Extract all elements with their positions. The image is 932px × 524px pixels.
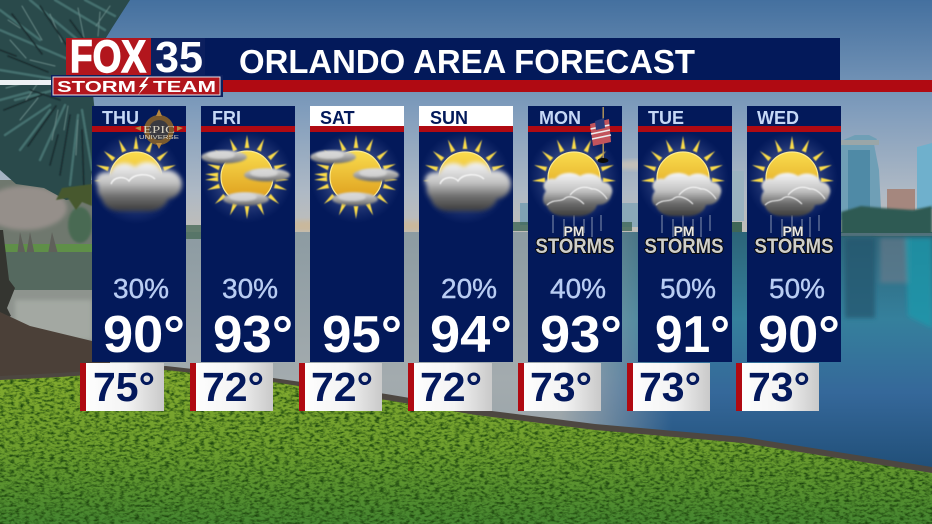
panel: Saturday: 95°: [322, 306, 402, 364]
panel: Sunday: [419, 106, 513, 364]
low temperature: Wednesday: 73°: [748, 364, 810, 410]
panel: Monday: STORMS: [536, 235, 614, 258]
panel: Monday: 40%: [550, 273, 606, 304]
skyline: [185, 135, 932, 239]
FOX 35 Storm Team logo: FOX: [70, 31, 146, 82]
left bank and far trees: [0, 180, 110, 381]
panel: Monday: 93°: [540, 306, 622, 364]
icon: PM storms: [746, 132, 838, 237]
palm fronds: [0, 0, 130, 210]
icon: partly cloudy: [90, 132, 182, 224]
panel: Friday: 93°: [213, 306, 293, 364]
panel: Sunday: 94°: [430, 306, 512, 364]
badge: Epic Universe: UNIVERSE: [139, 135, 179, 141]
icon: PM storms: [637, 132, 729, 237]
FOX 35 Storm Team logo: TEAM: [153, 79, 216, 96]
panel: Tuesday: STORMS: [644, 235, 724, 258]
FOX 35 Storm Team logo: 35: [155, 33, 203, 82]
header bar and title: [205, 38, 840, 80]
panel: Thursday: 30%: [113, 273, 169, 304]
panel: Wednesday: PM: [782, 223, 804, 239]
white stripe at left of logo: [0, 80, 52, 85]
header bar and title: ORLANDO AREA FORECAST: [239, 43, 695, 80]
panel: Friday: 30%: [222, 273, 278, 304]
badge: Epic Universe: EPIC: [143, 124, 175, 136]
panel: Monday: [528, 106, 622, 364]
FOX 35 Storm Team logo: [51, 31, 223, 97]
icon: mostly sunny: [310, 131, 402, 223]
badge: Epic Universe: [135, 109, 183, 149]
panel: Wednesday: WED: [757, 108, 799, 128]
panel: Tuesday: PM: [674, 223, 694, 239]
panel: Saturday: [310, 106, 404, 364]
panel: Tuesday: [637, 106, 732, 364]
panel: Monday: PM: [564, 223, 584, 239]
panel: Sunday: 20%: [441, 273, 497, 304]
FOX 35 Storm Team logo: STORM: [57, 79, 136, 96]
panel: Thursday: [90, 106, 186, 364]
low temperature: Friday: 72°: [202, 364, 264, 410]
panel: Wednesday: [746, 106, 841, 364]
panel: Saturday: SAT: [320, 108, 355, 128]
low temperature: Monday: 73°: [530, 364, 592, 410]
panel: Wednesday: 50%: [769, 273, 825, 304]
panel: Friday: [201, 106, 295, 364]
panel: Tuesday: 91°: [655, 306, 730, 364]
panel: Thursday: 90°: [103, 306, 185, 364]
panel: Tuesday: 50%: [660, 273, 716, 304]
grass bank: [0, 366, 932, 524]
water: [0, 232, 932, 524]
panel: Wednesday: 90°: [758, 306, 840, 364]
panel: Sunday: SUN: [430, 108, 468, 128]
sunset clouds: [230, 160, 670, 232]
low temperature: Thursday: 75°: [93, 364, 155, 410]
low temperature: Saturday: 72°: [311, 364, 373, 410]
icon: American flag: [590, 107, 611, 163]
icon: PM storms: [528, 132, 620, 237]
panel: Monday: MON: [539, 108, 581, 128]
icon: mostly sunny: [201, 131, 293, 223]
panel: Tuesday: TUE: [648, 108, 684, 128]
low temperature: Sunday: 72°: [420, 364, 482, 410]
red header band: [221, 80, 932, 92]
panel: Wednesday: STORMS: [754, 235, 834, 258]
icon: partly cloudy: [419, 132, 511, 224]
low temperature: Tuesday: 73°: [639, 364, 701, 410]
panel: Thursday: THU: [102, 108, 139, 128]
panel: Friday: FRI: [212, 108, 241, 128]
building reflections: [845, 238, 932, 328]
